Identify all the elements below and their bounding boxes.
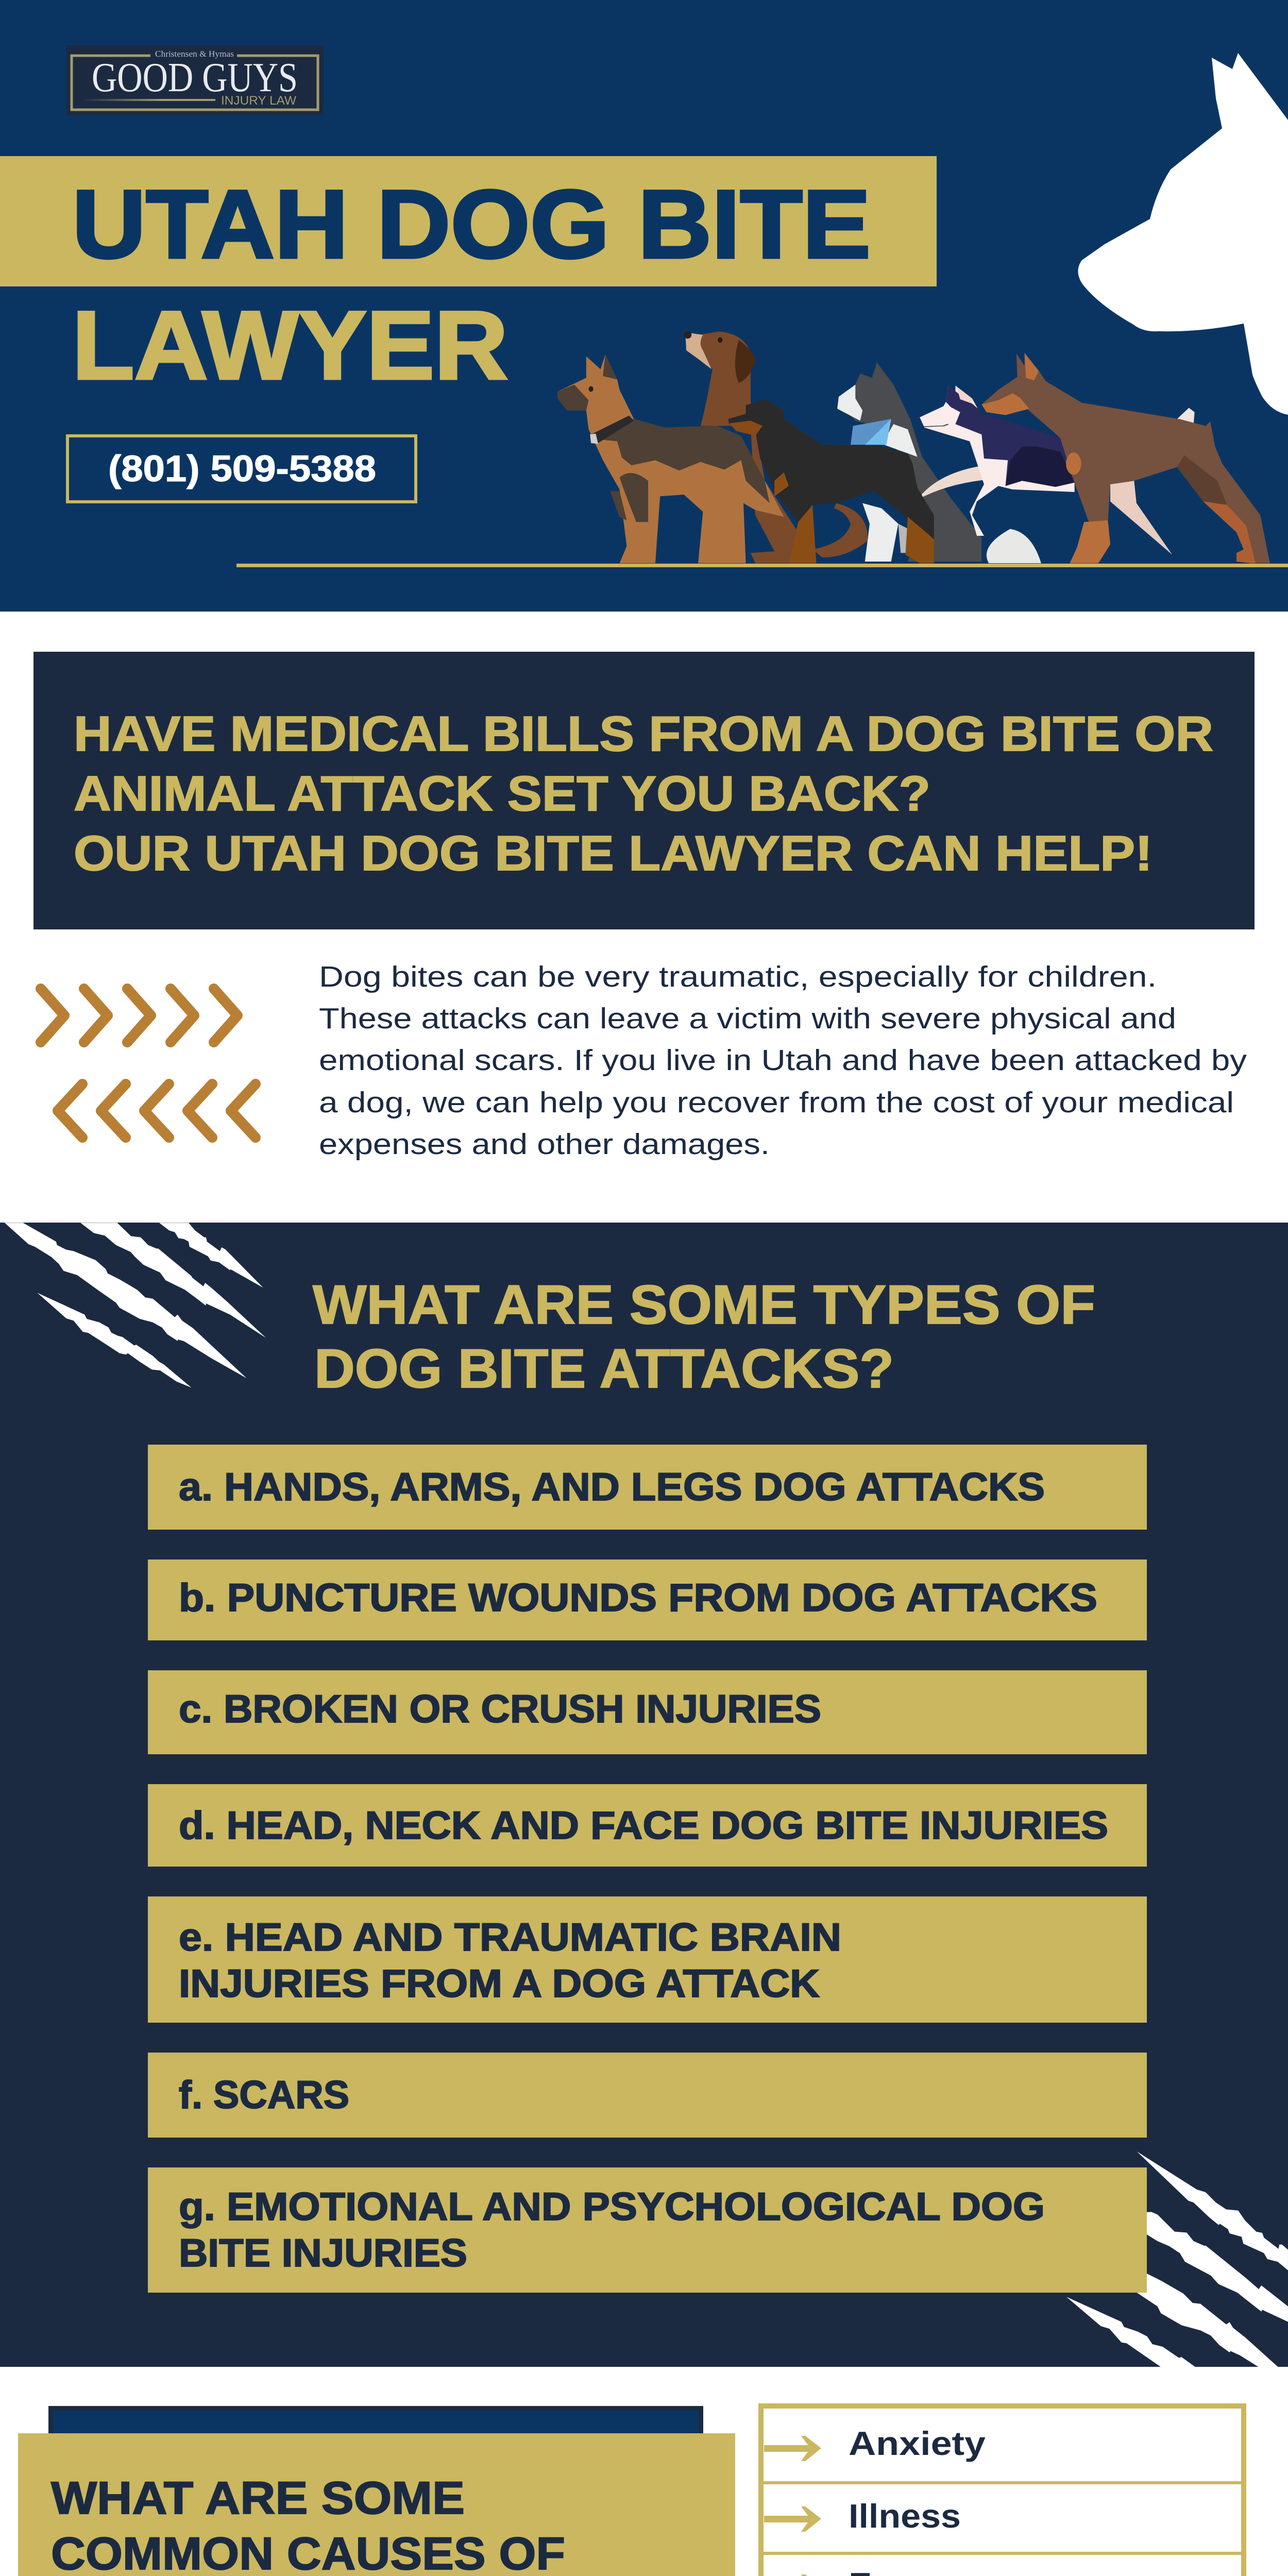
intro paragraph: a dog, we can help you recover from the cost of your medical	[319, 1086, 1234, 1119]
list item b: b. PUNCTURE WOUNDS FROM DOG ATTACKS	[179, 1576, 1097, 1620]
icon: white dog head silhouette	[1078, 53, 1288, 415]
husky	[918, 385, 1075, 536]
list item e	[148, 1896, 1147, 2023]
list item g: g. EMOTIONAL AND PSYCHOLOGICAL DOG	[179, 2185, 1045, 2229]
phone box	[67, 436, 416, 502]
intro paragraph: expenses and other damages.	[319, 1128, 770, 1161]
logo: Good Guys Injury Law: Christensen & Hymas	[155, 49, 234, 59]
arrow and label: anxiety: Anxiety	[849, 2425, 986, 2462]
german shepherd	[557, 354, 784, 563]
rottweiler	[728, 399, 934, 563]
panel: medical bills headline: OUR UTAH DOG BITE LAWYER CAN HELP!	[74, 826, 1153, 881]
illustration: group of dogs	[557, 331, 1270, 563]
heading: common causes	[51, 2472, 600, 2576]
intro paragraph: These attacks can leave a victim with severe physical and	[319, 1002, 1176, 1035]
panel: medical bills headline	[33, 652, 1255, 929]
list item f	[148, 2053, 1147, 2138]
arrow and label: anxiety	[764, 2425, 986, 2462]
intro paragraph	[319, 960, 1247, 1161]
title: lawyer: LAWYER	[72, 291, 508, 399]
arrow and label: fear	[764, 2566, 926, 2576]
arrow and label: illness: Illness	[849, 2497, 961, 2535]
icon: right-pointing chevrons	[41, 989, 238, 1042]
list item a	[148, 1445, 1147, 1530]
logo: Good Guys Injury Law: INJURY LAW	[221, 94, 296, 108]
title banner	[0, 156, 937, 286]
intro paragraph: Dog bites can be very traumatic, especially for children.	[319, 960, 1157, 993]
ground line	[236, 564, 1288, 567]
list item c	[148, 1670, 1147, 1754]
panel: common causes question	[18, 2406, 735, 2576]
hound dog	[684, 331, 868, 563]
panel: causes list	[761, 2406, 1244, 2576]
panel: medical bills headline: ANIMAL ATTACK SET YOU BACK?	[74, 766, 930, 821]
icon: bottom-right claw marks	[1066, 2151, 1288, 2368]
list item e: e. HEAD AND TRAUMATIC BRAIN	[179, 1916, 841, 1959]
title banner: UTAH DOG BITE	[72, 170, 871, 278]
heading: types of dog bite attacks	[313, 1274, 1095, 1399]
list item f: f. SCARS	[179, 2073, 349, 2117]
intro paragraph: emotional scars. If you live in Utah and have been attacked by	[319, 1044, 1247, 1077]
list item g: BITE INJURIES	[179, 2231, 467, 2275]
icon: top-left claw marks	[5, 1223, 266, 1387]
grey dog with blue scarf	[837, 362, 1041, 563]
heading: common causes: WHAT ARE SOME	[51, 2472, 465, 2523]
logo: Good Guys Injury Law: GOOD GUYS	[92, 55, 298, 100]
heading: types of dog bite attacks: WHAT ARE SOME TYPES OF	[313, 1274, 1095, 1335]
panel: header	[0, 0, 1288, 612]
list item e: INJURIES FROM A DOG ATTACK	[179, 1962, 820, 2006]
list item c: c. BROKEN OR CRUSH INJURIES	[179, 1687, 821, 1731]
arrow and label: illness	[764, 2497, 961, 2535]
list item d: d. HEAD, NECK AND FACE DOG BITE INJURIES	[179, 1804, 1108, 1848]
panel: types of dog bite attacks	[0, 1223, 1288, 2368]
icon: left-pointing chevrons	[58, 1084, 256, 1138]
heading: types of dog bite attacks: DOG BITE ATTACKS?	[314, 1337, 894, 1399]
doberman	[981, 353, 1270, 563]
list item b	[148, 1560, 1147, 1640]
logo: Good Guys Injury Law	[66, 45, 324, 115]
phone box: (801) 509-5388	[108, 449, 376, 489]
list item d	[148, 1784, 1147, 1867]
list item g	[148, 2167, 1147, 2293]
list item a: a. HANDS, ARMS, AND LEGS DOG ATTACKS	[179, 1465, 1045, 1509]
panel: medical bills headline: HAVE MEDICAL BILLS FROM A DOG BITE OR	[74, 706, 1213, 761]
